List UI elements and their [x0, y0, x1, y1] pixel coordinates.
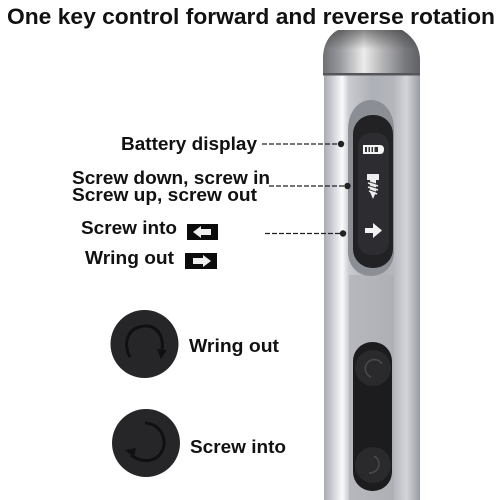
- barrel: [324, 74, 420, 500]
- icon: bottom rotation arrow: [369, 456, 379, 473]
- icon: right arrow box: [185, 253, 217, 269]
- icon: wring out knob: [110, 310, 178, 378]
- cap seam: [323, 73, 420, 76]
- cap top shading: [323, 30, 420, 73]
- icon: top rotation arrow: [365, 360, 382, 377]
- display inner button: [358, 133, 389, 255]
- label: battery display: Battery display: [121, 134, 257, 154]
- label: wring out: Wring out: [85, 248, 174, 268]
- icon: left arrow box: [187, 224, 218, 240]
- barrel centre panel: [349, 275, 394, 500]
- icon: screw: [367, 174, 379, 199]
- icon: screw into knob: [112, 409, 180, 477]
- icon: right arrow: [365, 223, 382, 238]
- label: screw down: Screw down, screw in: [72, 168, 270, 188]
- leader: screw into: [265, 230, 346, 237]
- title: One key control forward and reverse rotation: [7, 4, 495, 29]
- label: screw into knob: Screw into: [190, 436, 286, 457]
- panel: rocker switch: [353, 342, 392, 491]
- display bezel: [348, 100, 394, 276]
- leader: battery display: [262, 141, 344, 147]
- switch black strip: [353, 342, 392, 491]
- button: top: [355, 350, 391, 386]
- screwdriver body: [323, 30, 420, 500]
- label: screw into: Screw into: [81, 218, 177, 238]
- metal cap: [323, 30, 420, 73]
- display black strip: [353, 115, 393, 268]
- button: bottom: [355, 447, 391, 483]
- label: screw up: Screw up, screw out: [72, 185, 257, 205]
- icon: battery: [363, 145, 384, 154]
- leader: screw: [269, 183, 351, 189]
- label: wring out knob: Wring out: [189, 335, 279, 356]
- panel: display buttons: [348, 100, 394, 276]
